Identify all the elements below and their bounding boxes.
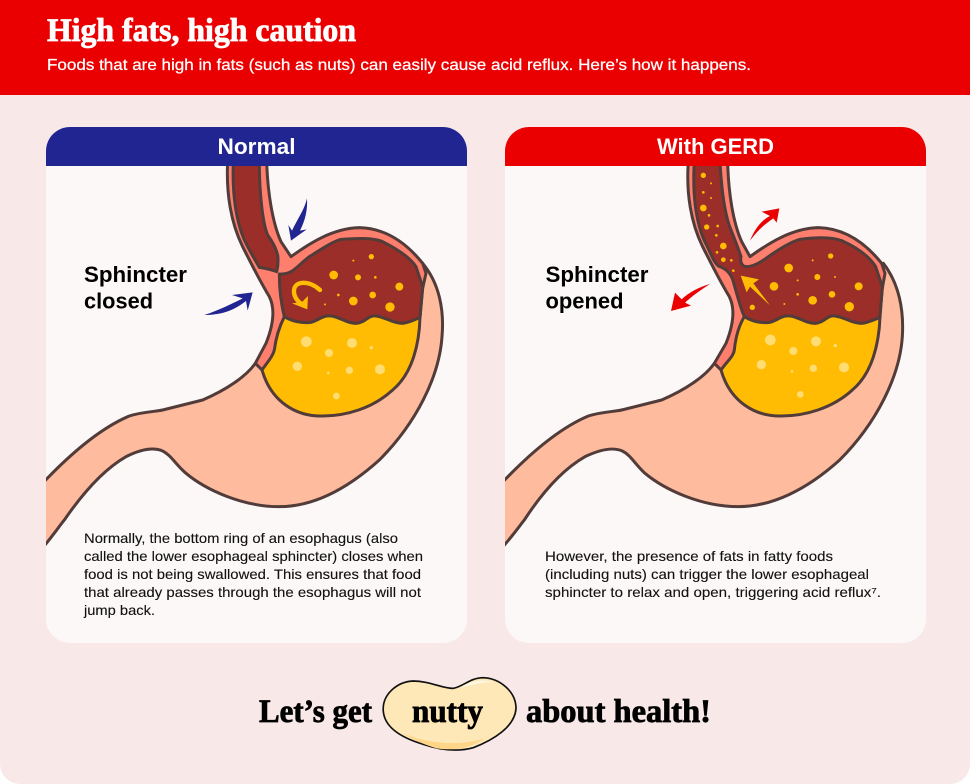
description: GERD: sphincter to relax and open, triggering acid reflux⁷. xyxy=(545,584,881,600)
fat bubbles xyxy=(700,173,863,311)
footer slogan: about health! xyxy=(526,694,711,730)
header banner xyxy=(0,0,970,95)
stomach illustration: normal xyxy=(39,162,443,552)
acid bubbles xyxy=(757,335,849,398)
description: normal: jump back. xyxy=(83,602,155,618)
label: sphincter opened: opened xyxy=(546,288,624,314)
arrow: left navy xyxy=(204,292,253,315)
panel header: with GERD xyxy=(505,127,926,166)
title: High fats, high caution xyxy=(47,13,356,49)
panel: with GERD xyxy=(498,127,926,643)
fat bubbles xyxy=(324,254,403,312)
arrow: top red xyxy=(750,208,779,241)
footer slogan: nutty xyxy=(412,694,483,730)
panel header: normal xyxy=(46,127,467,166)
acid bubbles xyxy=(293,336,385,399)
description: normal: that already passes through the esophagus will not xyxy=(84,584,421,600)
label: sphincter closed: Sphincter xyxy=(84,262,187,287)
description: normal xyxy=(83,530,423,618)
stomach illustration: GERD xyxy=(498,162,903,552)
description: normal: Normally, the bottom ring of an esophagus (also xyxy=(84,530,398,546)
description: GERD: (including nuts) can trigger the lower esophageal xyxy=(545,566,869,582)
arrow: yellow reflux xyxy=(741,276,770,305)
arrow: top navy xyxy=(288,198,307,241)
description: GERD xyxy=(545,548,881,600)
icon: curved yellow arrow xyxy=(292,283,320,309)
footer slogan: Let’s get xyxy=(259,694,372,730)
description: normal: called the lower esophageal sphincter) closes when xyxy=(84,548,423,564)
panel header: with GERD: With GERD xyxy=(657,134,774,159)
label: sphincter closed: closed xyxy=(84,288,153,314)
description: GERD: However, the presence of fats in fatty foods xyxy=(545,548,833,564)
label: sphincter closed xyxy=(84,262,187,314)
icon: nut bean xyxy=(383,678,516,750)
footer slogan xyxy=(259,678,711,750)
label: sphincter opened: Sphincter xyxy=(546,262,649,287)
arrow: left red xyxy=(671,284,710,311)
description: normal: food is not being swallowed. This ensures that food xyxy=(84,566,421,582)
panel: normal xyxy=(39,127,467,643)
subtitle: Foods that are high in fats (such as nuts) can easily cause acid reflux. Here’s how it happens. xyxy=(47,57,751,74)
label: sphincter opened xyxy=(546,262,649,314)
panel header: normal: Normal xyxy=(218,134,296,159)
